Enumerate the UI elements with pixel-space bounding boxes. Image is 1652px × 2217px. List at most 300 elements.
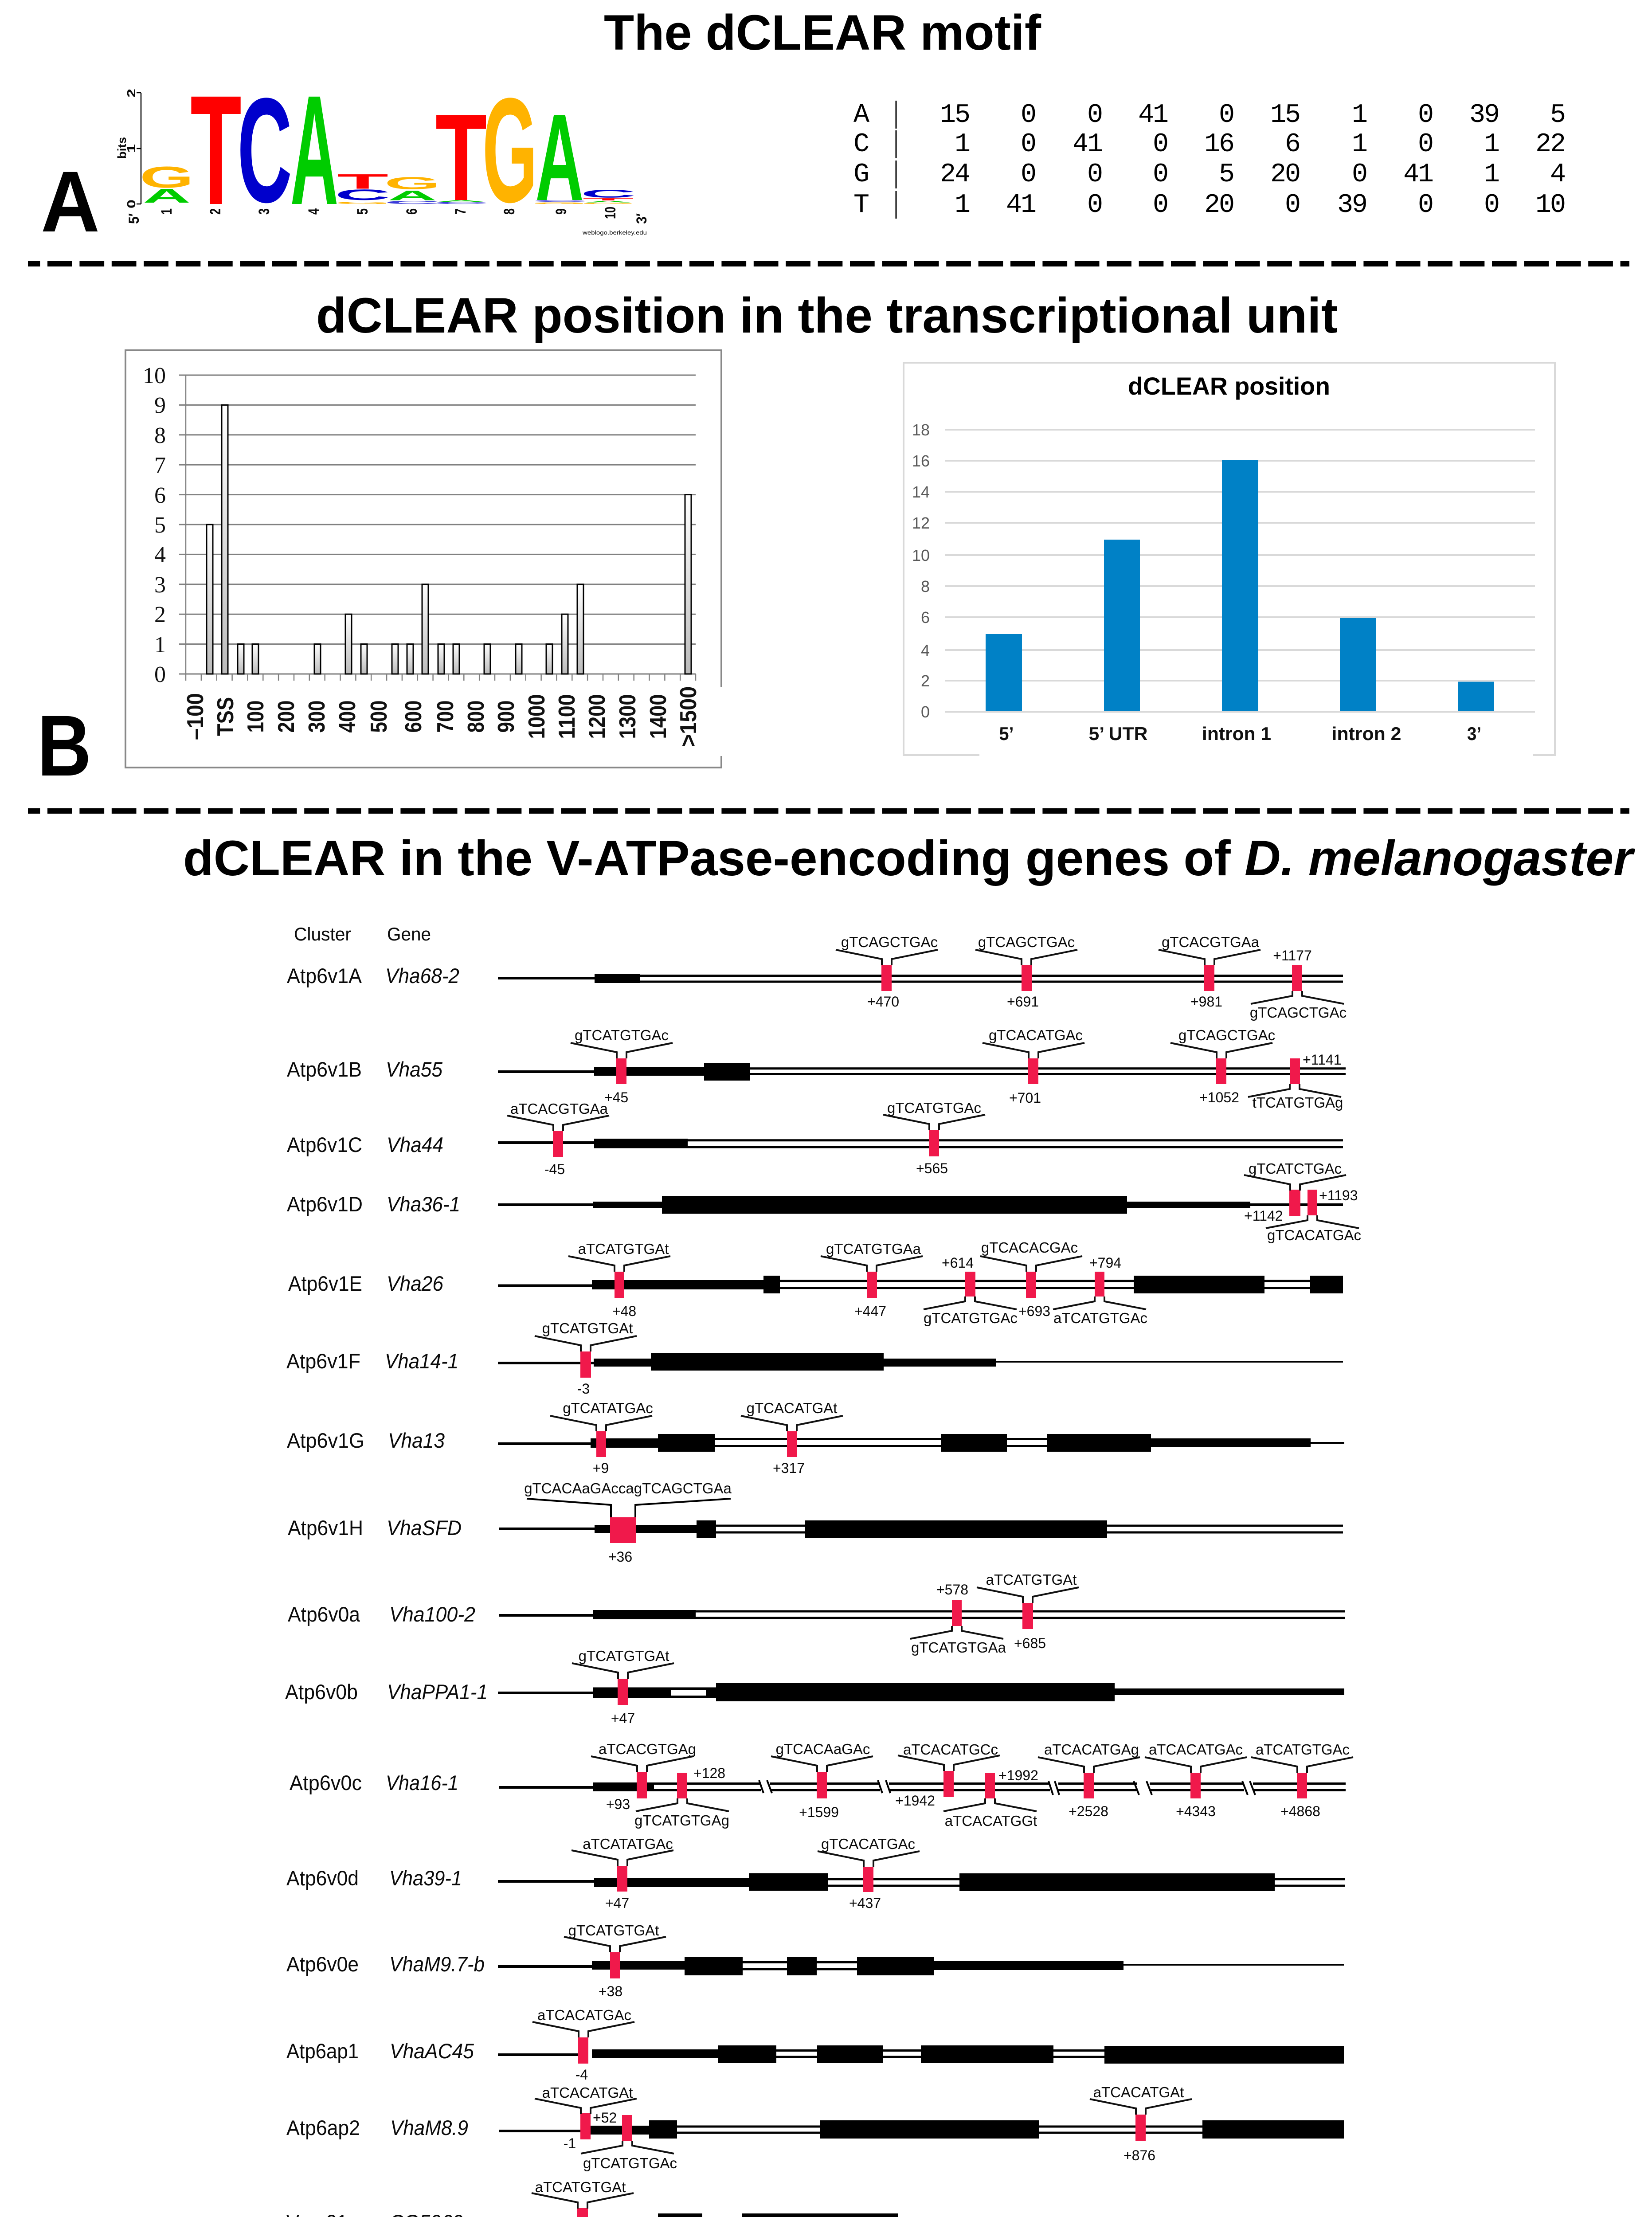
sequence logo chart: T: [337, 170, 388, 193]
site +47: +47: [611, 1710, 635, 1726]
sequence logo chart: 1: [125, 144, 138, 153]
site +685: +685: [1014, 1635, 1046, 1651]
sequence logo chart: 10: [602, 207, 619, 219]
bar chart: dCLEAR position by region: [904, 363, 1555, 755]
count matrix table: 0: [1153, 129, 1167, 160]
site +2528: +2528: [1069, 1803, 1108, 1819]
bar chart: dCLEAR position histogram: 10: [143, 363, 166, 388]
bar chart: dCLEAR position histogram: 8: [154, 423, 166, 448]
gene row: Atp6v0e VhaM9.7-b: Atp6v0e: [286, 1952, 359, 1976]
gene row: Vma21 CG5969: [286, 2179, 1344, 2217]
site +614: +614: [942, 1255, 974, 1271]
site +38: +38: [599, 1983, 622, 1999]
site -1: aTCACATGAt: [542, 2084, 633, 2101]
site +9: +9: [593, 1460, 609, 1476]
count matrix table: 20: [1204, 190, 1233, 220]
gene row: Atp6v1D Vha36-1: [287, 1160, 1361, 1243]
sequence logo chart: 5′: [126, 213, 142, 224]
gene row: Atp6v1A Vha68-2: Atp6v1A: [287, 964, 362, 987]
count matrix table: 0: [1153, 190, 1167, 220]
count matrix table: 0: [1153, 160, 1167, 190]
bar chart: dCLEAR position histogram: 7: [154, 453, 166, 478]
panel letter A: A: [41, 153, 100, 250]
sequence logo chart: 3′: [634, 213, 650, 224]
sequence logo chart: A: [290, 63, 338, 237]
count matrix table: 0: [1484, 190, 1499, 220]
site +9: gTCATATGAc: [563, 1400, 653, 1416]
site +447: gTCATGTGAa: [826, 1241, 921, 1257]
bar chart: dCLEAR position histogram: 6: [154, 483, 166, 508]
site +701: +701: [1009, 1090, 1041, 1106]
site +701: [983, 1027, 1084, 1106]
sequence logo chart: C: [335, 186, 390, 203]
bar chart: dCLEAR position by region: 0: [921, 703, 930, 721]
site +447: [821, 1241, 923, 1319]
bar chart: dCLEAR position histogram: [125, 350, 721, 768]
count matrix table: 0: [1285, 190, 1300, 220]
gene row: Atp6v0e VhaM9.7-b: [286, 1922, 1344, 1999]
site +36: +36: [608, 1549, 632, 1565]
gene row: Atp6v1E Vha26: [288, 1239, 1343, 1326]
site +47: aTCATATGAc: [583, 1836, 673, 1852]
site -4: [532, 2007, 634, 2083]
site -3: -3: [577, 1381, 590, 1397]
site +1992: aTCACATGGt: [945, 1813, 1037, 1829]
bar chart: dCLEAR position by region: 3’: [1467, 723, 1481, 744]
bar chart: dCLEAR position histogram: 900: [493, 701, 519, 732]
gene row: Atp6v1C Vha44: Vha44: [387, 1133, 443, 1156]
site +693: gTCACACGAc: [981, 1239, 1078, 1256]
bar chart: dCLEAR position histogram: 4: [154, 542, 166, 568]
site +794: +794: [1089, 1255, 1121, 1271]
count matrix table: 0: [1021, 129, 1035, 160]
sequence logo chart: 2: [125, 89, 138, 98]
site +981: [1159, 934, 1261, 1010]
count matrix table: 41: [1138, 100, 1168, 130]
count matrix table: 1: [1352, 100, 1367, 130]
site +578: [910, 1582, 1006, 1656]
site +876: aTCACATGAt: [1093, 2084, 1184, 2100]
site +614: gTCATGTGAc: [924, 1310, 1018, 1326]
site -1: [535, 2084, 637, 2151]
sequence logo chart: T: [583, 198, 634, 201]
site +36: [524, 1480, 732, 1565]
gene row: Atp6v0a Vha100-2: Atp6v0a: [288, 1602, 360, 1626]
site -11: aTCATGTGAt: [535, 2179, 626, 2195]
column headers: Gene: [387, 924, 431, 944]
count matrix table: 5: [1550, 100, 1565, 130]
sequence logo chart: 4: [305, 208, 322, 215]
site +1141: tTCATGTGAg: [1253, 1094, 1343, 1111]
count matrix table: 1: [1484, 160, 1499, 190]
bar chart: dCLEAR position histogram: 800: [463, 701, 489, 732]
site +578: +578: [936, 1582, 968, 1598]
site +437: [818, 1836, 920, 1911]
heading: dCLEAR position in the transcriptional unit: dCLEAR position in the transcriptional unit: [316, 288, 1338, 343]
site +2528: [1038, 1741, 1140, 1819]
sequence logo chart: A: [584, 200, 632, 203]
sequence logo chart: 8: [501, 208, 518, 215]
gene row: Atp6v1F Vha14-1: Atp6v1F: [286, 1349, 360, 1373]
gene row: Atp6ap2 VhaM8.9: VhaM8.9: [390, 2116, 468, 2139]
sequence logo chart: G: [384, 173, 440, 193]
gene row: Atp6v1E Vha26: Atp6v1E: [288, 1272, 362, 1295]
site +794: [1053, 1255, 1147, 1326]
sequence logo chart: 6: [403, 208, 420, 215]
site +565: gTCATGTGAc: [887, 1100, 981, 1116]
sequence logo chart: 5: [354, 208, 371, 215]
site +45: gTCATGTGAc: [575, 1027, 669, 1043]
site +447: +447: [854, 1303, 886, 1319]
site +4868: aTCATGTGAc: [1256, 1741, 1350, 1758]
gene row: Atp6v0e VhaM9.7-b: VhaM9.7-b: [389, 1952, 485, 1976]
site +1599: +1599: [799, 1804, 839, 1820]
bar chart: dCLEAR position by region: 6: [921, 608, 930, 627]
site +4868: [1251, 1741, 1353, 1819]
site +685: aTCATGTGAt: [986, 1571, 1077, 1588]
gene row: Atp6v1G Vha13: Vha13: [388, 1429, 445, 1452]
bar chart: dCLEAR position by region: 2: [921, 672, 930, 690]
sequence logo chart: [115, 63, 650, 237]
gene row: Atp6v0c Vha16-1: Vha16-1: [386, 1771, 458, 1794]
site +685: [977, 1571, 1079, 1651]
count matrix table: A: [853, 100, 869, 130]
gene row: Atp6v1B Vha55: [287, 1027, 1346, 1111]
sequence logo chart: A: [535, 89, 584, 227]
count matrix table: C: [853, 129, 869, 160]
site -3: gTCATGTGAt: [542, 1320, 633, 1336]
count matrix table: 6: [1285, 129, 1300, 160]
sequence logo chart: C: [237, 68, 292, 234]
site -4: aTCACATGAc: [537, 2007, 631, 2023]
count matrix table: 39: [1469, 100, 1499, 130]
count matrix table: 0: [1418, 129, 1433, 160]
gene row: Atp6v1C Vha44: [287, 1100, 1343, 1177]
site +1599: gTCACAaGAc: [776, 1741, 870, 1757]
count matrix table: 16: [1204, 129, 1233, 160]
sequence logo chart: 0: [125, 200, 138, 208]
bar chart: dCLEAR position histogram: 100: [243, 701, 269, 732]
site +470: +470: [867, 994, 899, 1010]
site +38: gTCATGTGAt: [568, 1922, 659, 1939]
site -4: -4: [575, 2067, 588, 2083]
gene row: Atp6v1D Vha36-1: Atp6v1D: [287, 1192, 363, 1216]
gene row: Atp6ap1 VhaAC45: Atp6ap1: [286, 2039, 359, 2063]
bar chart: dCLEAR position histogram: 2: [154, 602, 166, 627]
site +691: [975, 934, 1077, 1010]
site +1177: gTCAGCTGAc: [1250, 1004, 1347, 1021]
site +4868: +4868: [1280, 1803, 1320, 1819]
sequence logo chart: T: [190, 63, 242, 237]
count matrix table: [853, 100, 1565, 220]
site +128: +128: [693, 1765, 725, 1781]
count matrix table: 15: [1270, 100, 1300, 130]
site +1942: [895, 1741, 1000, 1809]
gene row: Atp6ap2 VhaM8.9: Atp6ap2: [286, 2116, 360, 2139]
site +1942: +1942: [895, 1793, 935, 1809]
site -3: [535, 1320, 637, 1397]
site +317: gTCACATGAt: [747, 1400, 837, 1416]
site +4343: aTCACATGAc: [1149, 1741, 1243, 1758]
site +45: +45: [604, 1089, 628, 1105]
site +52: +52: [593, 2110, 617, 2126]
bar chart: dCLEAR position by region: 8: [921, 577, 930, 595]
count matrix table: 41: [1403, 160, 1433, 190]
bar chart: dCLEAR position histogram: 300: [304, 701, 330, 732]
count matrix table: 0: [1021, 160, 1035, 190]
site +47: gTCATGTGAt: [579, 1648, 669, 1664]
site +470: gTCAGCTGAc: [841, 934, 938, 950]
site +437: +437: [849, 1895, 881, 1911]
count matrix table: 1: [1484, 129, 1499, 160]
count matrix table: 15: [940, 100, 969, 130]
site +1141: [1248, 1052, 1343, 1111]
site +1177: [1250, 948, 1347, 1021]
gene row: Atp6v1E Vha26: Vha26: [387, 1272, 444, 1295]
bar chart: dCLEAR position histogram: TSS: [213, 697, 239, 736]
gene row: Atp6v0d Vha39-1: Atp6v0d: [286, 1866, 359, 1890]
column headers: [294, 924, 431, 944]
site -1: -1: [564, 2135, 576, 2151]
gene row: Atp6v1A Vha68-2: Vha68-2: [385, 964, 459, 987]
site +45: [571, 1027, 673, 1105]
bar chart: dCLEAR position histogram: 0: [154, 662, 166, 687]
sequence logo chart: A: [437, 200, 485, 202]
site +1193: gTCACATGAc: [1267, 1227, 1361, 1243]
site +1142: gTCATCTGAc: [1249, 1160, 1342, 1177]
count matrix table: 0: [1418, 100, 1433, 130]
gene row: Atp6v0a Vha100-2: Vha100-2: [389, 1602, 475, 1626]
site +693: +693: [1018, 1303, 1050, 1319]
site +47: [572, 1836, 673, 1911]
bar chart: dCLEAR position by region: 16: [912, 452, 930, 470]
sequence logo chart: G: [140, 160, 194, 194]
gene row: Atp6v0d Vha39-1: [286, 1836, 1345, 1911]
gene row: Atp6v1G Vha13: [287, 1400, 1344, 1476]
sequence logo chart: 1: [158, 208, 175, 215]
gene row: Atp6v0d Vha39-1: Vha39-1: [389, 1866, 462, 1890]
bar chart: dCLEAR position histogram: 3: [154, 572, 166, 598]
bar chart: dCLEAR position by region: 4: [921, 641, 930, 659]
column headers: Cluster: [294, 924, 351, 944]
site +1142: [1244, 1160, 1346, 1224]
sequence logo chart: bits: [115, 137, 129, 159]
panel letter B: B: [37, 697, 91, 794]
count matrix table: 0: [1087, 160, 1102, 190]
gene row: Atp6v1D Vha36-1: Vha36-1: [387, 1192, 460, 1216]
bar chart: dCLEAR position histogram: 1400: [646, 694, 671, 739]
site +47: +47: [605, 1895, 629, 1911]
site -45: -45: [544, 1161, 565, 1177]
bar chart: dCLEAR position histogram: 1: [154, 632, 166, 658]
bar chart: dCLEAR position by region: 5’ UTR: [1089, 723, 1147, 744]
site +48: aTCATGTGAt: [578, 1241, 669, 1257]
site +470: [836, 934, 938, 1010]
site +1177: +1177: [1273, 948, 1312, 964]
sequence logo chart: 3: [256, 208, 273, 215]
site +1992: +1992: [998, 1767, 1038, 1783]
gene row: Atp6v1C Vha44: Atp6v1C: [287, 1133, 362, 1156]
site +437: gTCACATGAc: [821, 1836, 915, 1852]
bar chart: dCLEAR position histogram: 700: [433, 701, 458, 732]
gene row: Atp6v1A Vha68-2: [287, 934, 1347, 1021]
gene row: Atp6v1H VhaSFD: VhaSFD: [387, 1516, 462, 1539]
sequence logo chart: 9: [553, 208, 570, 215]
count matrix table: 5: [1219, 160, 1233, 190]
gene row: Atp6v1G Vha13: Atp6v1G: [287, 1429, 364, 1452]
site +52: [581, 2110, 677, 2171]
count matrix table: 39: [1337, 190, 1366, 220]
gene row: Atp6v1B Vha55: Atp6v1B: [287, 1058, 362, 1081]
count matrix table: 41: [1073, 129, 1102, 160]
site +981: gTCACGTGAa: [1162, 934, 1260, 950]
site +93: [591, 1741, 696, 1812]
gene row: Atp6v0a Vha100-2: [288, 1571, 1345, 1656]
gene row: Atp6v0c Vha16-1: [290, 1741, 1353, 1829]
count matrix table: 0: [1021, 100, 1035, 130]
bar chart: dCLEAR position histogram: 1300: [615, 694, 641, 739]
site +47: [572, 1648, 674, 1726]
site +48: +48: [612, 1303, 636, 1319]
count matrix table: 0: [1352, 160, 1366, 190]
site +48: [568, 1241, 670, 1319]
gene row: Atp6v1B Vha55: Vha55: [386, 1058, 443, 1081]
sequence logo chart: A: [388, 188, 437, 203]
site -11: [532, 2179, 634, 2217]
site +2528: aTCACATGAg: [1044, 1741, 1139, 1758]
site +794: aTCATGTGAc: [1053, 1310, 1147, 1326]
count matrix table: T: [853, 190, 869, 220]
count matrix table: 0: [1418, 190, 1433, 220]
sequence logo chart: T: [435, 89, 487, 227]
site +1141: +1141: [1303, 1052, 1342, 1068]
gene row: Atp6v1H VhaSFD: [288, 1480, 1343, 1565]
site +876: +876: [1124, 2147, 1155, 2163]
sequence logo chart: C: [434, 201, 489, 204]
site +1052: [1170, 1027, 1275, 1105]
site +691: gTCAGCTGAc: [978, 934, 1075, 950]
site +4343: +4343: [1176, 1803, 1216, 1819]
count matrix table: 41: [1006, 190, 1036, 220]
site +578: gTCATGTGAa: [911, 1639, 1006, 1656]
site +981: +981: [1190, 994, 1222, 1010]
site +128: [634, 1765, 729, 1829]
bar chart: dCLEAR position by region: intron 1: [1202, 723, 1271, 744]
sequence logo chart: C: [581, 188, 636, 200]
site +1052: +1052: [1199, 1089, 1239, 1105]
bar chart: dCLEAR position histogram: 1100: [554, 694, 580, 739]
count matrix table: 4: [1550, 160, 1565, 190]
sequence logo chart: G: [482, 67, 537, 234]
site +1052: gTCAGCTGAc: [1178, 1027, 1275, 1043]
site +1193: [1266, 1187, 1361, 1243]
site +1142: +1142: [1244, 1208, 1283, 1224]
bar chart: dCLEAR position histogram: 400: [335, 701, 360, 732]
site +1193: +1193: [1319, 1187, 1358, 1203]
sequence logo chart: G: [581, 202, 636, 204]
site -45: [507, 1101, 609, 1177]
site +693: [980, 1239, 1082, 1319]
site +614: [924, 1255, 1018, 1326]
bar chart: dCLEAR position histogram: 1000: [524, 694, 550, 739]
count matrix table: G: [853, 160, 868, 190]
site +4343: [1145, 1741, 1247, 1819]
count matrix table: 22: [1535, 129, 1565, 160]
gene row: Atp6v1F Vha14-1: Vha14-1: [385, 1349, 458, 1373]
heading: dCLEAR in the V-ATPase-encoding genes of D. melanogaster: dCLEAR in the V-ATPase-encoding genes of D. melanogaster: [183, 830, 1635, 886]
site +565: [883, 1100, 985, 1176]
site +317: +317: [773, 1460, 805, 1476]
sequence logo chart: weblogo.berkeley.edu: [582, 229, 647, 236]
bar chart: dCLEAR position histogram: 500: [366, 701, 392, 732]
sequence logo chart: 2: [207, 208, 224, 215]
site +128: gTCATGTGAg: [634, 1812, 729, 1829]
count matrix table: 1: [955, 129, 970, 160]
bar chart: dCLEAR position histogram: 200: [274, 701, 299, 732]
heading: The dCLEAR motif: The dCLEAR motif: [604, 5, 1041, 60]
site +691: +691: [1007, 994, 1039, 1010]
count matrix table: 10: [1535, 190, 1565, 220]
site +52: gTCATGTGAc: [583, 2155, 677, 2171]
gene row: Atp6ap1 VhaAC45: [286, 2007, 1344, 2083]
gene row: Atp6ap1 VhaAC45: VhaAC45: [390, 2039, 474, 2063]
gene row: Atp6v0b VhaPPA1-1: [285, 1648, 1344, 1726]
bar chart: dCLEAR position by region: 5’: [999, 723, 1014, 744]
bar chart: dCLEAR position histogram: 600: [401, 701, 427, 732]
bar chart: dCLEAR position histogram: 9: [154, 393, 166, 418]
bar chart: dCLEAR position by region: dCLEAR position: [1128, 372, 1330, 400]
site +701: gTCACATGAc: [989, 1027, 1083, 1043]
site +1599: [771, 1741, 873, 1820]
count matrix table: 1: [955, 190, 970, 220]
gene row: Atp6v0c Vha16-1: Atp6v0c: [290, 1771, 362, 1794]
gene row: Atp6v1F Vha14-1: [286, 1320, 1343, 1397]
site +93: +93: [606, 1796, 630, 1812]
sequence logo chart: G: [532, 202, 587, 204]
site +1942: aTCACATGCc: [903, 1741, 998, 1758]
count matrix table: 1: [1352, 129, 1367, 160]
count matrix table: 0: [1087, 190, 1102, 220]
site +36: gTCACAaGAccagTCAGCTGAa: [524, 1480, 732, 1496]
sequence logo chart: C: [384, 200, 440, 205]
count matrix table: 20: [1270, 160, 1300, 190]
gene row: Atp6v0b VhaPPA1-1: Atp6v0b: [285, 1680, 358, 1704]
count matrix table: 0: [1219, 100, 1233, 130]
bar chart: dCLEAR position histogram: 5: [154, 513, 166, 538]
bar chart: dCLEAR position histogram: >1500: [676, 686, 701, 747]
bar chart: dCLEAR position histogram: –100: [183, 693, 208, 740]
site +317: [741, 1400, 843, 1476]
bar chart: dCLEAR position by region: 10: [912, 546, 930, 564]
bar chart: dCLEAR position by region: 14: [912, 483, 930, 501]
site -45: aTCACGTGAa: [510, 1101, 608, 1117]
gene row: Atp6ap2 VhaM8.9: [286, 2084, 1344, 2171]
count matrix table: 24: [940, 160, 969, 190]
site +9: [550, 1400, 653, 1476]
bar chart: dCLEAR position histogram: 1200: [584, 694, 610, 739]
site +565: +565: [916, 1160, 948, 1176]
site +38: [564, 1922, 666, 1999]
bar chart: dCLEAR position by region: 18: [912, 421, 930, 439]
sequence logo chart: C: [532, 200, 587, 202]
gene row: Atp6v1H VhaSFD: Atp6v1H: [288, 1516, 363, 1539]
site +93: aTCACGTGAg: [599, 1741, 696, 1757]
gene row: Atp6v0b VhaPPA1-1: VhaPPA1-1: [387, 1680, 488, 1704]
bar chart: dCLEAR position by region: 12: [912, 514, 930, 532]
sequence logo chart: G: [335, 201, 390, 204]
count matrix table: 0: [1087, 100, 1102, 130]
sequence logo chart: 7: [452, 208, 469, 215]
